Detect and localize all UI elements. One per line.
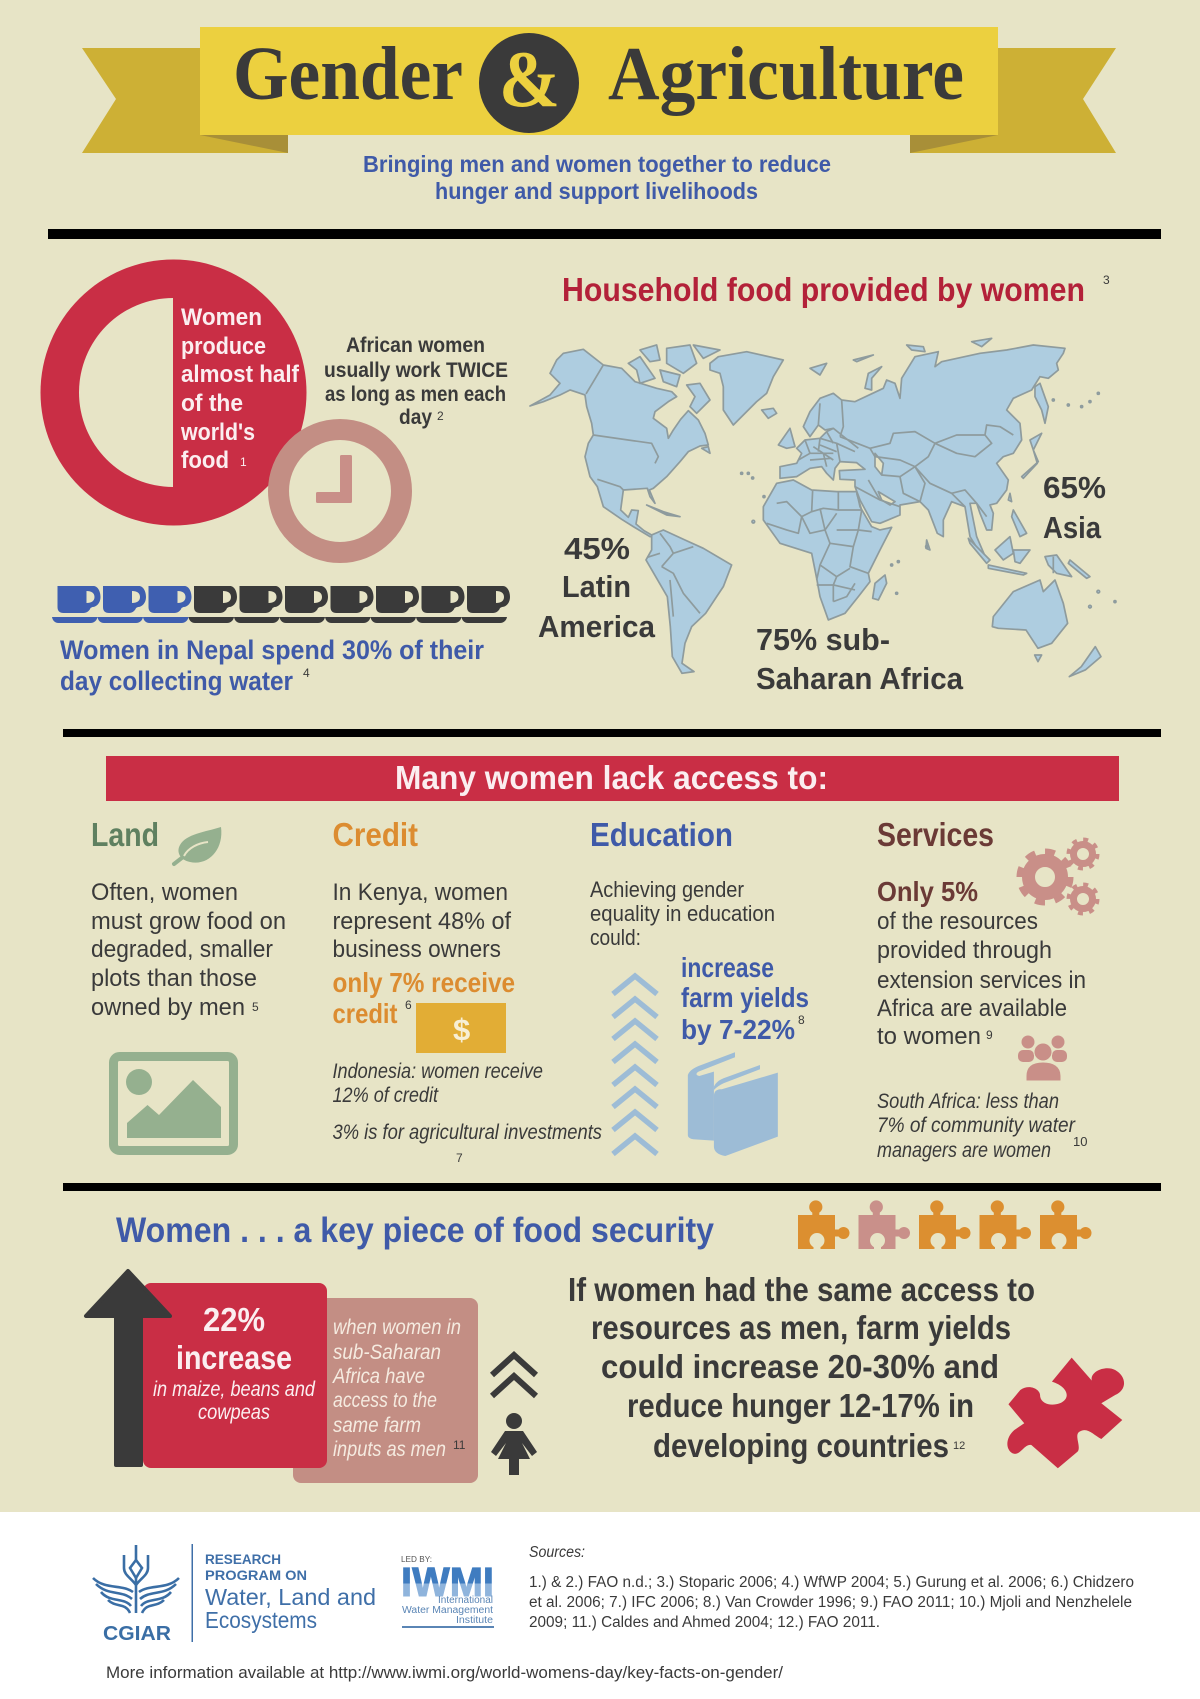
text: same access statement: 12: [953, 1440, 965, 1452]
map label: sub-Saharan Africa: 75% sub-: [756, 622, 890, 657]
land text: owned by men: [91, 994, 245, 1021]
world map: [530, 338, 1116, 677]
education text: [590, 877, 775, 950]
credit italic notes: [332, 1060, 602, 1165]
heading: household food provided by women: 3: [1103, 273, 1110, 287]
subtitle: [363, 151, 831, 204]
logo text: research program: [205, 1552, 376, 1633]
callout box: farm inputs: inputs as men: [333, 1438, 446, 1461]
icon row: ten water cups: [52, 586, 510, 623]
credit highlight: [332, 967, 515, 1029]
logo: CGIAR: CGIAR: [103, 1623, 172, 1645]
education heading: Education: [590, 816, 733, 853]
land text: plots than those: [91, 965, 257, 992]
icon: upward chevrons: [613, 976, 657, 1154]
icon: red puzzle piece: [1007, 1358, 1124, 1468]
half-ring statement: 1: [240, 455, 247, 469]
text: same access statement: could increase 20-30% and: [601, 1348, 999, 1385]
services text: [877, 908, 1086, 1050]
callout box: 22 percent: in maize, beans and: [153, 1378, 316, 1401]
callout box: 22 percent: [143, 1283, 327, 1468]
text: Nepal water collection: Women in Nepal spend 30% of their: [60, 635, 484, 665]
text: Nepal water collection: 4: [303, 666, 310, 680]
icon: people group: [1018, 1036, 1067, 1081]
panel: education: [590, 816, 809, 1156]
ribbon main panel: [200, 27, 998, 135]
callout box: farm inputs: Africa have: [331, 1365, 425, 1388]
text: same access statement: [568, 1271, 1035, 1464]
logo text: research program: RESEARCH: [205, 1552, 281, 1567]
sources: Sources:: [529, 1544, 585, 1561]
half-ring statement: Women: [181, 304, 262, 331]
services italic note: managers are women: [877, 1139, 1051, 1162]
land text: degraded, smaller: [91, 936, 273, 963]
logo: IWMI: Water Management: [402, 1605, 493, 1616]
services italic note: 7% of community water: [877, 1114, 1076, 1137]
ribbon right fold: [910, 135, 998, 153]
footer panel: [0, 1512, 1200, 1699]
text: African women work twice as long: [324, 334, 508, 429]
sources: et al. 2006; 7.) IFC 2006; 8.) Van Crowder 1996; 9.) FAO 2011; 10.) Mjoli and Nenzhelele: [529, 1594, 1132, 1611]
map label: Asia: [1043, 470, 1106, 545]
ribbon left fold: [200, 135, 288, 153]
title word Agriculture: Agriculture: [608, 32, 964, 116]
ribbon left tail: [82, 48, 288, 153]
icon: clock: [278, 430, 402, 552]
text: African women work twice as long: 2: [437, 409, 444, 423]
callout box: farm inputs: [293, 1298, 478, 1483]
education highlight: by 7-22%: [681, 1014, 795, 1045]
half-ring statement: food: [181, 447, 229, 474]
credit italic notes: 3% is for agricultural investments: [332, 1121, 602, 1144]
icon: leaf: [174, 827, 221, 864]
icon: dollar bill: [416, 1003, 506, 1053]
half-ring statement: almost half: [181, 361, 300, 388]
credit italic notes: 7: [456, 1151, 463, 1165]
sources: 2009; 11.) Caldes and Ahmed 2004; 12.) FAO 2011.: [529, 1614, 880, 1631]
panel: services: [877, 816, 1098, 1162]
ampersand badge: &: [499, 36, 560, 124]
map: Europe, Africa, Asia, Oceania: [763, 338, 1116, 677]
land text: must grow food on: [91, 908, 286, 935]
map label: Asia: 65%: [1043, 470, 1106, 505]
map label: Latin America: Latin: [562, 569, 631, 604]
heading: women a key piece of food security: Women . . . a key piece of food security: [116, 1211, 714, 1250]
land text: 5: [252, 1000, 259, 1014]
logo: IWMI: International: [438, 1595, 493, 1606]
sources: 1.) & 2.) FAO n.d.; 3.) Stoparic 2006; 4.) WfWP 2004; 5.) Gurung et al. 2006; 6.) Chidzero: [529, 1574, 1134, 1591]
text: same access statement: reduce hunger 12-17% in: [627, 1387, 974, 1424]
icon: dollar bill: $: [453, 1012, 470, 1047]
credit highlight: 6: [405, 998, 412, 1012]
education highlight: farm yields: [681, 982, 809, 1013]
credit highlight: only 7% receive: [332, 967, 515, 998]
panel: women produce half of food: [40, 260, 306, 526]
services highlight: Only 5%: [877, 876, 978, 907]
credit text: business owners: [332, 936, 501, 963]
credit italic notes: Indonesia: women receive: [332, 1060, 543, 1083]
text: same access statement: If women had the same access to: [568, 1271, 1035, 1308]
panel: credit: [332, 816, 602, 1165]
services text: 9: [986, 1028, 993, 1042]
map label: Asia: Asia: [1043, 510, 1102, 545]
icon: dark chevrons: [492, 1355, 536, 1396]
map label: Latin America: 45%: [564, 531, 630, 566]
subtitle: Bringing men and women together to reduce: [363, 151, 831, 177]
credit text: In Kenya, women: [332, 879, 508, 906]
land text: Often, women: [91, 879, 238, 906]
callout box: 22 percent: increase: [176, 1339, 292, 1376]
credit text: represent 48% of: [332, 908, 511, 935]
credit text: [332, 879, 511, 963]
ampersand badge: [479, 33, 579, 133]
callout box: 22 percent: cowpeas: [198, 1401, 270, 1424]
more information link text: More information available at http://www.iwmi.org/world-womens-day/key-facts-on-gender/: [106, 1663, 783, 1682]
map label: sub-Saharan Africa: Saharan Africa: [756, 661, 964, 696]
text: Nepal water collection: [60, 635, 484, 696]
half-ring statement: produce: [181, 333, 266, 360]
panel: land: [91, 816, 286, 1150]
half-ring statement: of the: [181, 390, 243, 417]
banner: many women lack access to: Many women lack access to:: [395, 759, 828, 796]
icon: landscape picture: [114, 1056, 234, 1150]
education text: equality in education: [590, 901, 775, 926]
half-ring statement: world's: [180, 419, 255, 446]
logo text: research program: PROGRAM ON: [205, 1568, 307, 1583]
icon: gears: [1020, 840, 1098, 914]
services italic note: South Africa: less than: [877, 1090, 1059, 1113]
text: African women work twice as long: African women: [346, 334, 485, 357]
services text: extension services in: [877, 967, 1086, 994]
land text: [91, 879, 286, 1021]
services heading: Services: [877, 816, 994, 853]
services italic note: 10: [1073, 1134, 1087, 1149]
credit highlight: credit: [332, 998, 398, 1029]
icon: up arrow: [86, 1271, 170, 1465]
banner: many women lack access to: [106, 756, 1119, 801]
icon: woman: [491, 1413, 537, 1475]
education text: Achieving gender: [590, 877, 744, 902]
logo: IWMI: Institute: [456, 1615, 493, 1626]
logo: CGIAR: [93, 1545, 179, 1645]
services text: provided through: [877, 937, 1052, 964]
services text: to women: [877, 1023, 981, 1050]
logo: IWMI: LED BY:: [401, 1554, 432, 1564]
education highlight: 8: [798, 1013, 805, 1027]
icon row: puzzle pieces: [798, 1200, 1092, 1249]
services text: Africa are available: [877, 995, 1067, 1022]
heading: household food provided by women: Household food provided by women: [562, 271, 1085, 308]
half-ring statement: [180, 304, 300, 474]
logo text: research program: Ecosystems: [205, 1607, 317, 1633]
credit heading: Credit: [332, 816, 418, 853]
callout box: farm inputs: when women in: [333, 1316, 461, 1339]
title banner: [82, 27, 1116, 153]
map: Americas: [530, 345, 783, 673]
callout box: 22 percent: 22%: [203, 1301, 265, 1338]
services italic note: [877, 1090, 1087, 1162]
land heading: Land: [91, 816, 159, 853]
subtitle: hunger and support livelihoods: [435, 178, 758, 204]
text: Nepal water collection: day collecting water: [60, 666, 293, 696]
red half-ring chart: [40, 260, 306, 526]
map label: Latin America: America: [538, 609, 656, 644]
education highlight: [681, 952, 809, 1045]
text: African women work twice as long: day: [399, 406, 432, 429]
sources: [529, 1544, 1134, 1631]
map label: Latin America: [538, 531, 656, 644]
logo text: research program: Water, Land and: [205, 1584, 376, 1610]
logo: IWMI: IWMI: [401, 1559, 494, 1605]
education highlight: increase: [681, 952, 774, 983]
callout box: farm inputs: sub-Saharan: [333, 1341, 441, 1364]
ribbon right tail: [910, 48, 1116, 153]
map label: sub-Saharan Africa: [756, 622, 964, 696]
text: same access statement: resources as men, farm yields: [591, 1309, 1011, 1346]
text: African women work twice as long: as long as men each: [325, 383, 506, 406]
education text: could:: [590, 925, 641, 950]
credit italic notes: 12% of credit: [332, 1084, 439, 1107]
services text: of the resources: [877, 908, 1038, 935]
text: same access statement: developing countries: [653, 1427, 949, 1464]
text: African women work twice as long: usually work TWICE: [324, 359, 508, 382]
callout box: farm inputs: 11: [453, 1438, 466, 1452]
callout box: farm inputs: same farm: [333, 1414, 421, 1437]
title word Gender: Gender: [233, 32, 463, 116]
logo: IWMI: [401, 1554, 494, 1628]
callout box: farm inputs: access to the: [333, 1389, 437, 1412]
panel: 22 percent increase: [86, 1271, 537, 1483]
icon: books: [688, 1052, 778, 1156]
